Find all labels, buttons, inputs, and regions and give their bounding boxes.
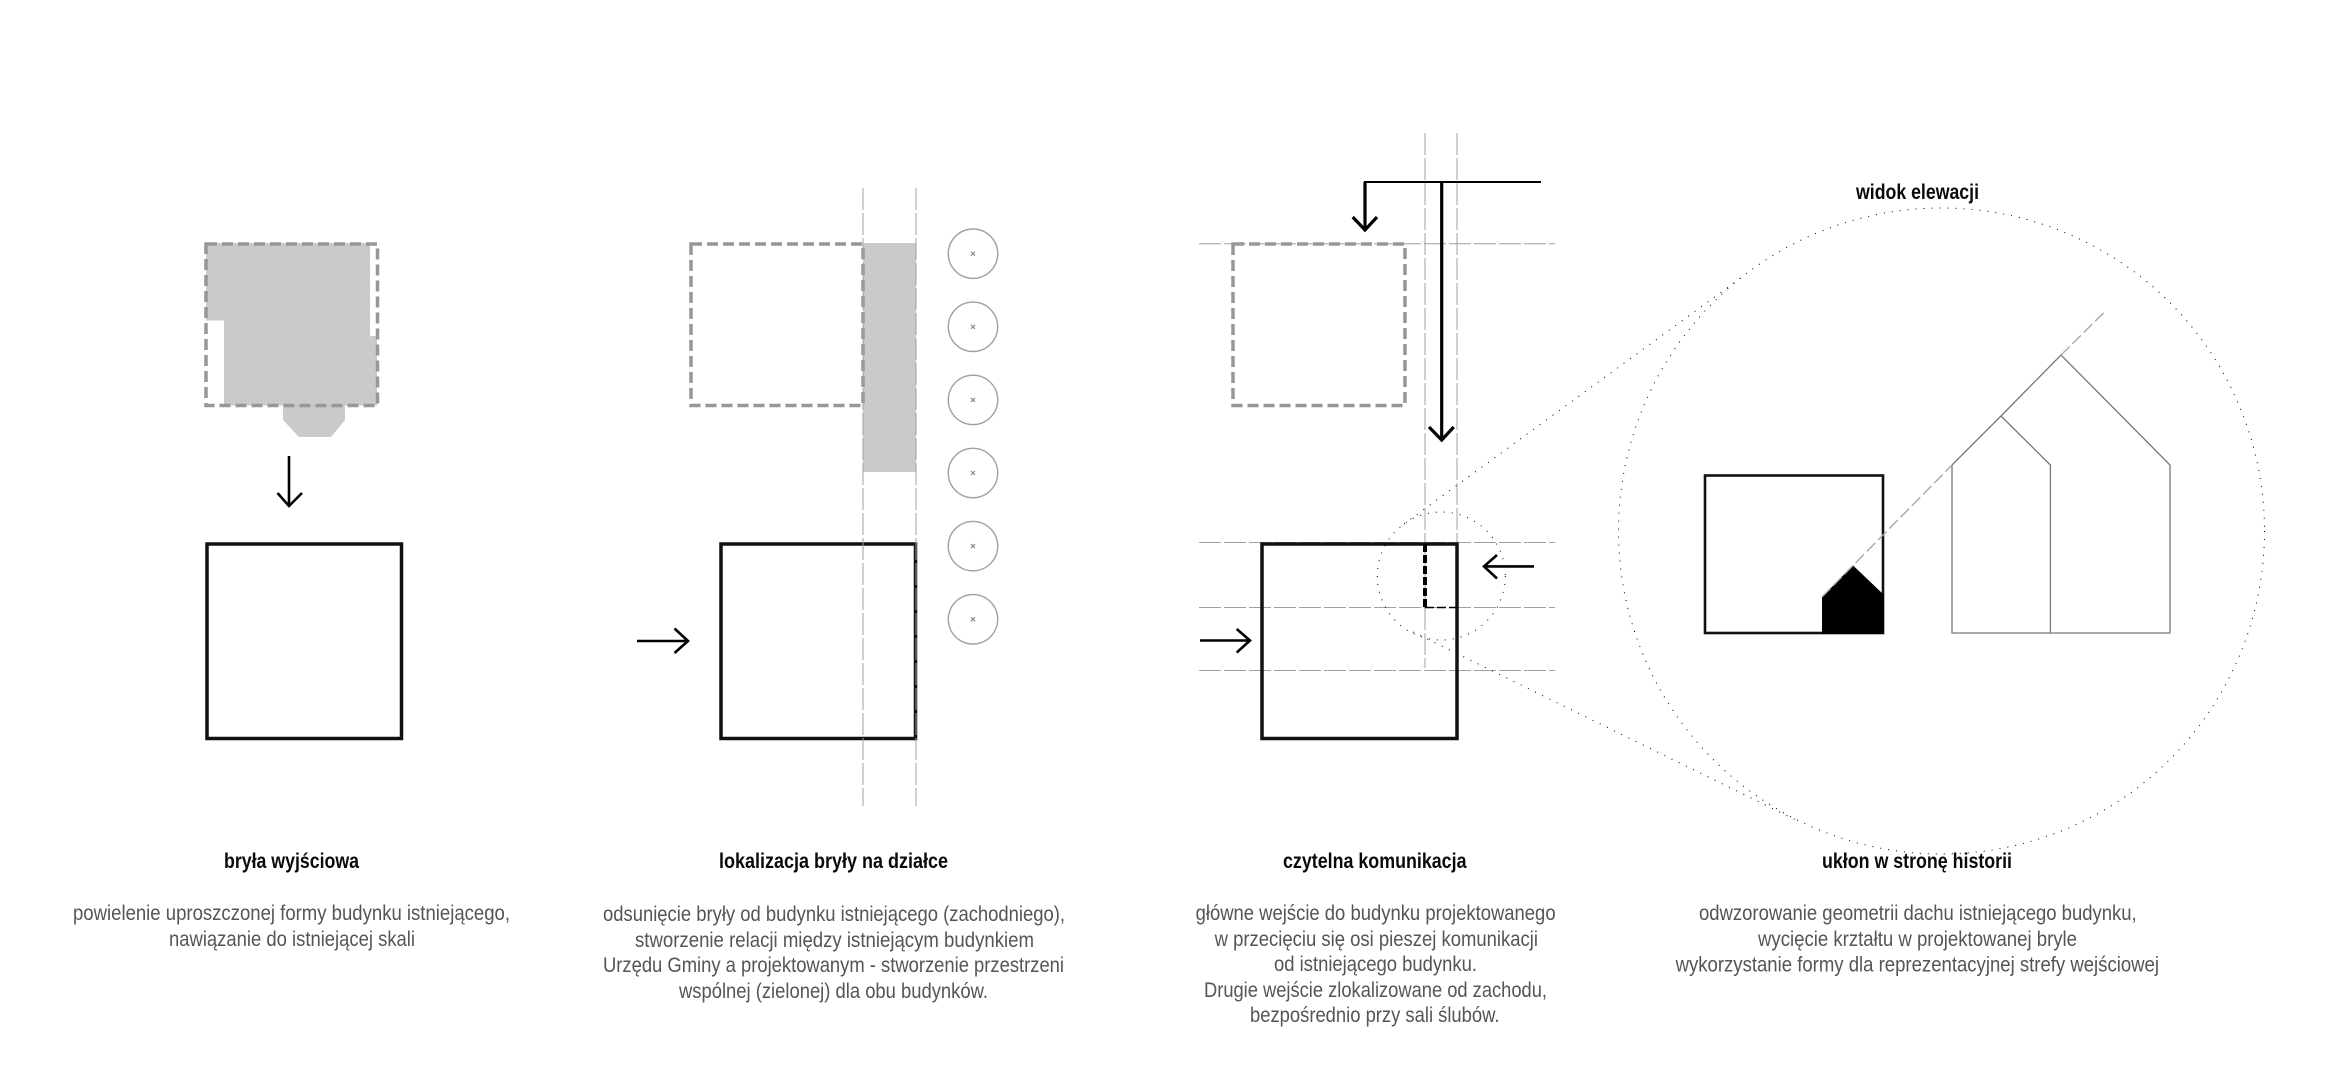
existing building footprint	[206, 243, 377, 437]
caption: czytelna komunikacja: Drugie wejście zlokalizowane od zachodu,	[1204, 979, 1547, 1002]
dotted detail circle	[1377, 512, 1505, 640]
caption: bryła wyjściowa: bryła wyjściowa	[224, 850, 359, 873]
caption: ukłon w stronę historii: ukłon w stronę historii	[1822, 850, 2012, 873]
caption: czytelna komunikacja: bezpośrednio przy sali ślubów.	[1250, 1004, 1500, 1027]
caption: bryła wyjściowa	[73, 850, 510, 951]
caption: lokalizacja bryły na działce: odsunięcie bryły od budynku istniejącego (zachodniego),	[603, 903, 1065, 926]
entrance cut-out	[1425, 544, 1457, 608]
caption: bryła wyjściowa: nawiązanie do istniejącej skali	[169, 928, 415, 951]
zoom connector lines	[1404, 277, 1800, 822]
dashed outline of simplified form	[206, 244, 378, 406]
gray neighbouring building strip	[863, 243, 916, 472]
caption: lokalizacja bryły na działce	[603, 850, 1065, 1003]
caption: ukłon w stronę historii: wykorzystanie formy dla reprezentacyjnej strefy wejściowej	[1675, 954, 2159, 976]
row of trees	[948, 229, 998, 644]
solid square form	[207, 544, 402, 738]
square block with cut-out	[1705, 476, 1883, 633]
dashed outline of building	[1233, 244, 1405, 406]
arrow down	[278, 456, 302, 506]
dotted magnifier circle	[1618, 208, 2264, 854]
caption: czytelna komunikacja: czytelna komunikacja	[1283, 850, 1467, 873]
horizontal axis lines	[1199, 244, 1555, 670]
vertical axis lines	[863, 188, 916, 806]
caption: czytelna komunikacja: od istniejącego budynku.	[1274, 953, 1477, 976]
dashed outline of building	[691, 244, 863, 406]
caption: czytelna komunikacja: główne wejście do budynku projektowanego	[1196, 902, 1556, 925]
caption: ukłon w stronę historii	[1675, 850, 2159, 976]
arrow right	[637, 628, 688, 653]
caption: ukłon w stronę historii: odwzorowanie geometrii dachu istniejącego budynku,	[1699, 902, 2137, 925]
arrow from west	[1200, 629, 1250, 653]
solid square form	[721, 544, 916, 738]
elevation of existing building	[1952, 355, 2170, 633]
caption: lokalizacja bryły na działce: lokalizacja bryły na działce	[719, 850, 948, 873]
caption: bryła wyjściowa: powielenie uproszczonej formy budynku istniejącego,	[73, 902, 510, 925]
caption: ukłon w stronę historii: wycięcie krztałtu w projektowanej bryle	[1757, 928, 2077, 951]
panel: ukłon w stronę historii diagram	[1618, 181, 2264, 854]
roof slope guide line	[1822, 465, 1952, 597]
caption: lokalizacja bryły na działce: Urzędu Gminy a projektowanym - stworzenie przestrzeni	[603, 954, 1064, 977]
caption: lokalizacja bryły na działce: stworzenie relacji między istniejącym budynkiem	[635, 929, 1034, 952]
caption: lokalizacja bryły na działce: wspólnej (zielonej) dla obu budynków.	[678, 980, 988, 1003]
panel: lokalizacja bryły diagram	[637, 188, 998, 806]
panel: czytelna komunikacja diagram	[1199, 133, 1555, 738]
caption: czytelna komunikacja	[1196, 850, 1556, 1027]
caption: czytelna komunikacja: w przecięciu się osi pieszej komunikacji	[1214, 928, 1538, 951]
roof slope extension	[2061, 312, 2104, 355]
black house cut-out	[1822, 565, 1884, 634]
panel: bryła wyjściowa diagram	[206, 243, 402, 738]
arrow from east	[1484, 555, 1534, 578]
solid square form	[1262, 544, 1457, 738]
vertical axis lines	[1425, 133, 1457, 668]
access line with two arrows	[1353, 182, 1541, 440]
heading: widok elewacji: widok elewacji	[1855, 181, 1979, 204]
